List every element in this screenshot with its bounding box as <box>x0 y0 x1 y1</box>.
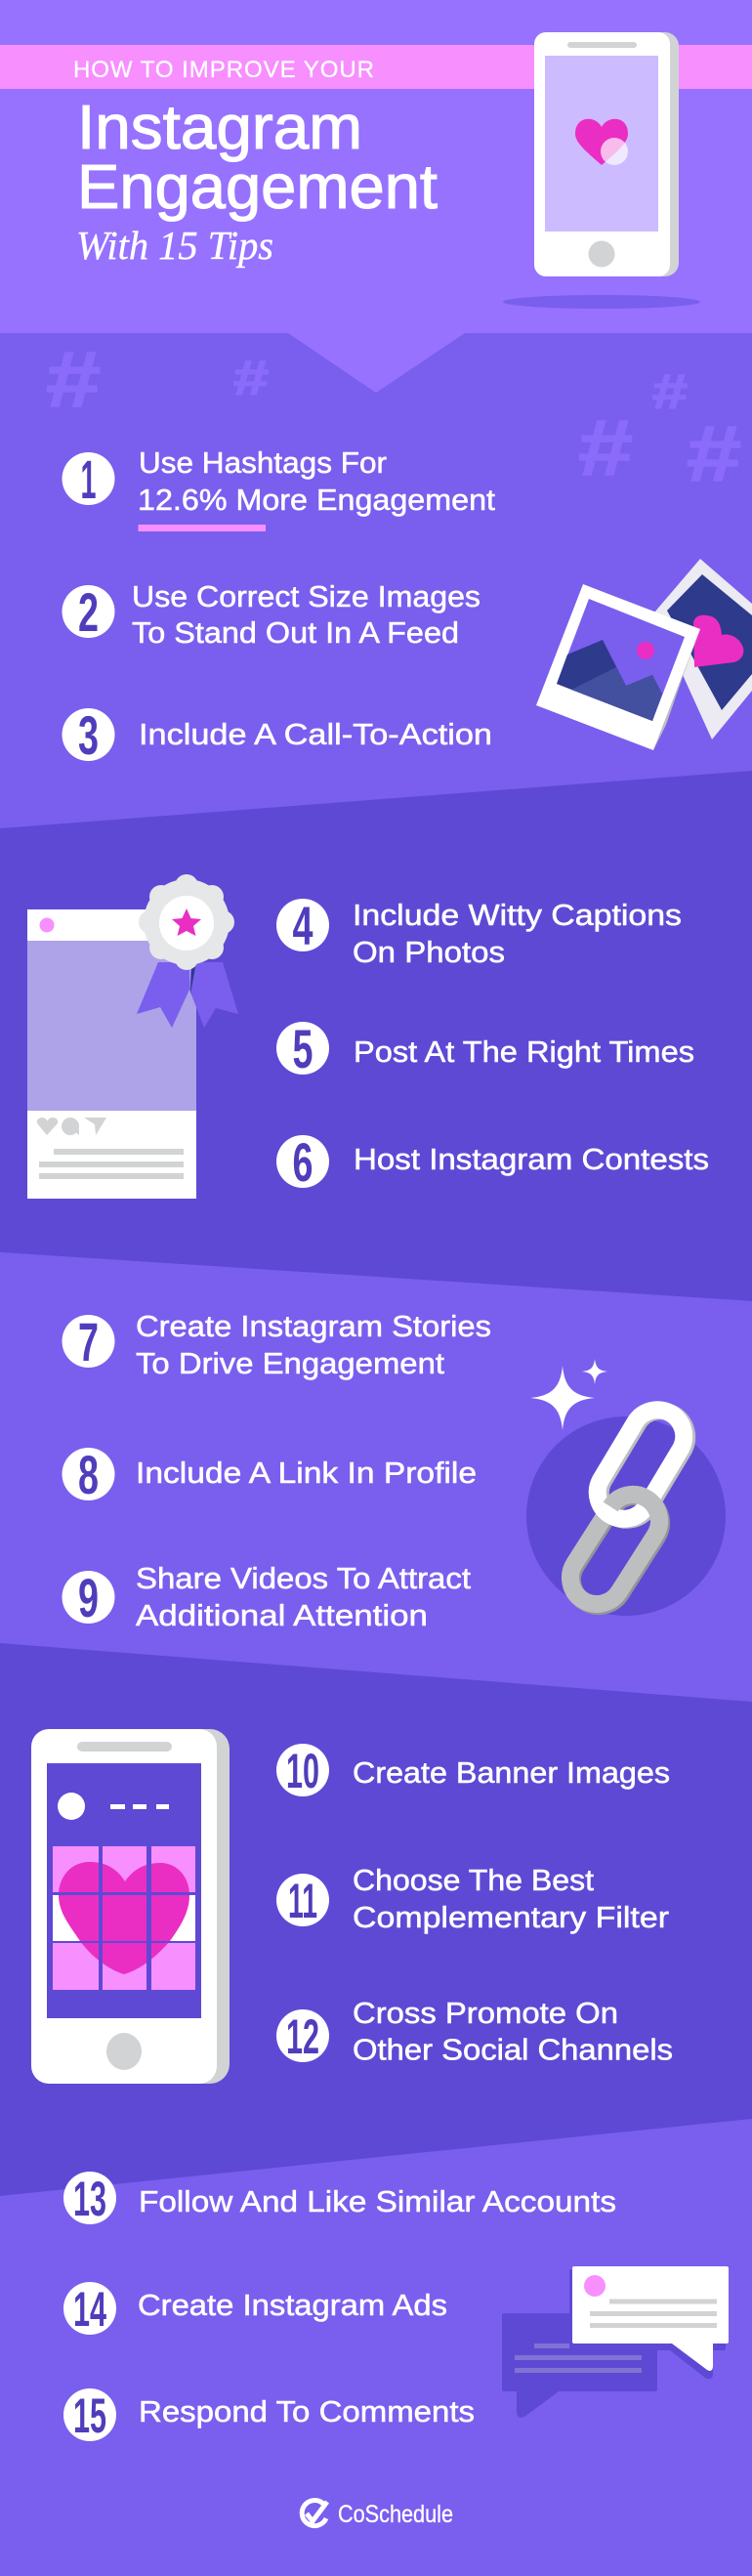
icon: post card with award badge <box>27 874 238 1199</box>
subtitle: With 15 Tips <box>76 223 273 268</box>
tip 8: Include A Link In Profile <box>136 1456 477 1490</box>
tip 13: 13 <box>73 2172 106 2226</box>
tip 9 <box>63 1561 471 1632</box>
tip 8: 8 <box>78 1444 99 1505</box>
icon: speech bubbles <box>502 2266 729 2418</box>
tip 14 <box>63 2282 447 2337</box>
tip 2: 2 <box>78 581 99 643</box>
tip 14: 14 <box>73 2282 106 2337</box>
hashtag decorations: # <box>46 336 101 424</box>
tip 11: Complementary Filter <box>353 1900 669 1934</box>
hashtag decorations: # <box>233 351 269 405</box>
tip 15: 15 <box>73 2388 106 2443</box>
kicker text: HOW TO IMPROVE YOUR <box>73 57 374 83</box>
tip 12 <box>276 1996 673 2067</box>
tip 14: Create Instagram Ads <box>138 2288 447 2322</box>
tip 5: 5 <box>293 1018 313 1079</box>
tip 7: To Drive Engagement <box>136 1346 444 1380</box>
icon: chain link with sparkles <box>526 1359 726 1616</box>
hashtag decorations: # <box>687 410 741 498</box>
tip 1 <box>63 445 495 531</box>
tip 15 <box>63 2388 475 2443</box>
tip 7 <box>63 1309 491 1380</box>
title <box>77 92 438 222</box>
tip 1: 1 <box>80 448 96 510</box>
icon: photos <box>536 559 752 750</box>
tip 11 <box>276 1863 669 1934</box>
hashtag decorations: # <box>652 364 688 419</box>
tip 4: 4 <box>293 895 313 956</box>
title: Engagement <box>77 151 438 222</box>
tip 8 <box>63 1444 477 1505</box>
tip 1: Use Hashtags For <box>139 445 387 480</box>
tip 13 <box>63 2172 616 2226</box>
tip 5 <box>276 1018 694 1079</box>
logo: CoSchedule: CoSchedule <box>338 2501 453 2528</box>
tip 4: Include Witty Captions <box>353 898 682 932</box>
hashtag decorations <box>46 336 741 498</box>
tip 9: Additional Attention <box>136 1598 428 1632</box>
tip 4 <box>276 895 682 969</box>
hashtag decorations: # <box>578 404 633 492</box>
pink banner strip <box>0 45 752 89</box>
tip 9: Share Videos To Attract <box>136 1561 471 1595</box>
tip 3: Include A Call-To-Action <box>139 717 492 751</box>
tip 2 <box>63 579 480 650</box>
tip 12: Other Social Channels <box>353 2032 673 2067</box>
panel: header <box>0 32 752 309</box>
icon: phone with heart grid <box>31 1729 230 2084</box>
tip 10: 10 <box>286 1744 319 1798</box>
tip 1: 12.6% More Engagement <box>138 483 495 517</box>
tip 3 <box>63 704 492 766</box>
logo: CoSchedule <box>302 2501 453 2528</box>
tip 6 <box>276 1131 709 1193</box>
tip 6: Host Instagram Contests <box>354 1142 709 1176</box>
tip 5: Post At The Right Times <box>354 1035 694 1069</box>
icon: phone with heart <box>503 32 700 309</box>
tip 11: 11 <box>288 1874 317 1928</box>
tip 7: Create Instagram Stories <box>136 1309 491 1343</box>
tip 4: On Photos <box>353 935 505 969</box>
tip 15: Respond To Comments <box>139 2394 475 2428</box>
tip 13: Follow And Like Similar Accounts <box>139 2184 616 2218</box>
tip 6: 6 <box>293 1131 313 1193</box>
tip 3: 3 <box>78 704 99 766</box>
tip 9: 9 <box>78 1567 99 1628</box>
notch arrow <box>288 333 465 393</box>
tip 12: 12 <box>286 2009 319 2064</box>
tip 10: Create Banner Images <box>353 1755 670 1790</box>
tip 11: Choose The Best <box>353 1863 594 1897</box>
tip 12: Cross Promote On <box>353 1996 618 2030</box>
tip 7: 7 <box>78 1311 99 1372</box>
title: Instagram <box>77 92 362 162</box>
tip 2: Use Correct Size Images <box>132 579 480 613</box>
tip 2: To Stand Out In A Feed <box>132 615 459 650</box>
tip 10 <box>276 1744 670 1798</box>
